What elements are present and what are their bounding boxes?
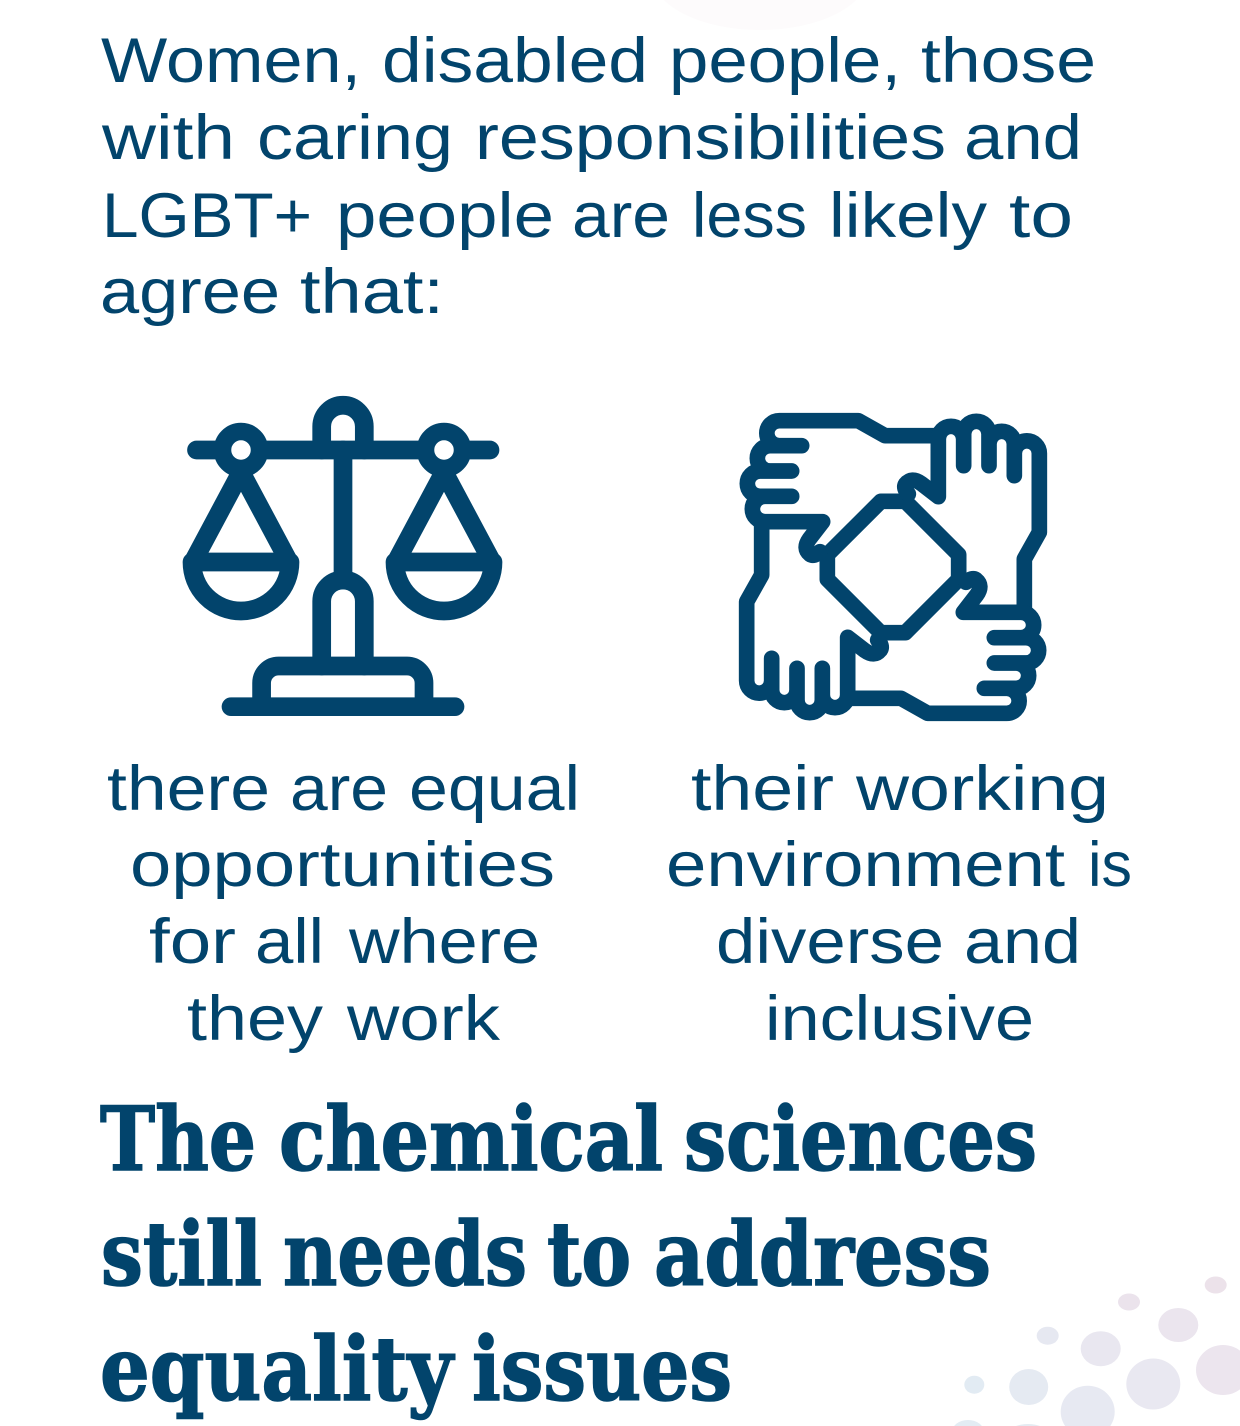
heading: sciences xyxy=(684,1087,1037,1191)
intro text: that: xyxy=(300,257,444,327)
intro text: with xyxy=(101,103,235,173)
heading: to xyxy=(547,1202,631,1306)
caption: diverse and inclusive: inclusive xyxy=(765,984,1034,1054)
intro text: to xyxy=(1009,181,1073,251)
intro text: responsibilities xyxy=(475,103,946,173)
caption: equal opportunities xyxy=(107,754,580,1054)
intro text: caring xyxy=(257,103,453,173)
intro text: those xyxy=(921,26,1096,96)
icon: four linked hands xyxy=(747,421,1039,713)
caption: diverse and inclusive: working xyxy=(855,754,1109,824)
caption: diverse and inclusive: and xyxy=(964,907,1081,977)
background dots xyxy=(952,1276,1240,1426)
caption: diverse and inclusive xyxy=(666,754,1132,1054)
heading: address xyxy=(654,1202,991,1306)
intro text: people, xyxy=(669,26,901,96)
intro text: LGBT+ xyxy=(102,181,312,251)
caption: diverse and inclusive: is xyxy=(1088,830,1132,900)
heading: The xyxy=(100,1087,256,1191)
intro text: disabled xyxy=(382,26,648,96)
caption: equal opportunities: opportunities xyxy=(130,830,555,900)
heading xyxy=(100,1087,1037,1421)
caption: equal opportunities: for xyxy=(149,907,236,977)
caption: equal opportunities: they xyxy=(187,984,324,1054)
intro text: agree xyxy=(100,257,280,327)
caption: equal opportunities: work xyxy=(346,984,501,1054)
intro text: likely xyxy=(829,181,988,251)
caption: diverse and inclusive: environment xyxy=(666,830,1066,900)
caption: diverse and inclusive: their xyxy=(691,754,834,824)
intro text: Women, xyxy=(101,26,361,96)
caption: diverse and inclusive: diverse xyxy=(716,907,944,977)
heading: equality xyxy=(100,1317,456,1421)
intro text: people xyxy=(336,181,554,251)
intro text: less xyxy=(692,181,807,251)
caption: equal opportunities: are xyxy=(290,754,388,824)
heading: needs xyxy=(283,1202,527,1306)
caption: equal opportunities: where xyxy=(348,907,540,977)
heading: issues xyxy=(472,1317,732,1421)
intro text: are xyxy=(572,181,670,251)
icon: balance scales xyxy=(192,405,493,707)
intro text xyxy=(100,26,1096,327)
caption: equal opportunities: all xyxy=(255,907,324,977)
intro text: and xyxy=(964,103,1082,173)
caption: equal opportunities: there xyxy=(107,754,270,824)
heading: still xyxy=(101,1202,262,1306)
caption: equal opportunities: equal xyxy=(409,754,580,824)
heading: chemical xyxy=(279,1087,663,1191)
